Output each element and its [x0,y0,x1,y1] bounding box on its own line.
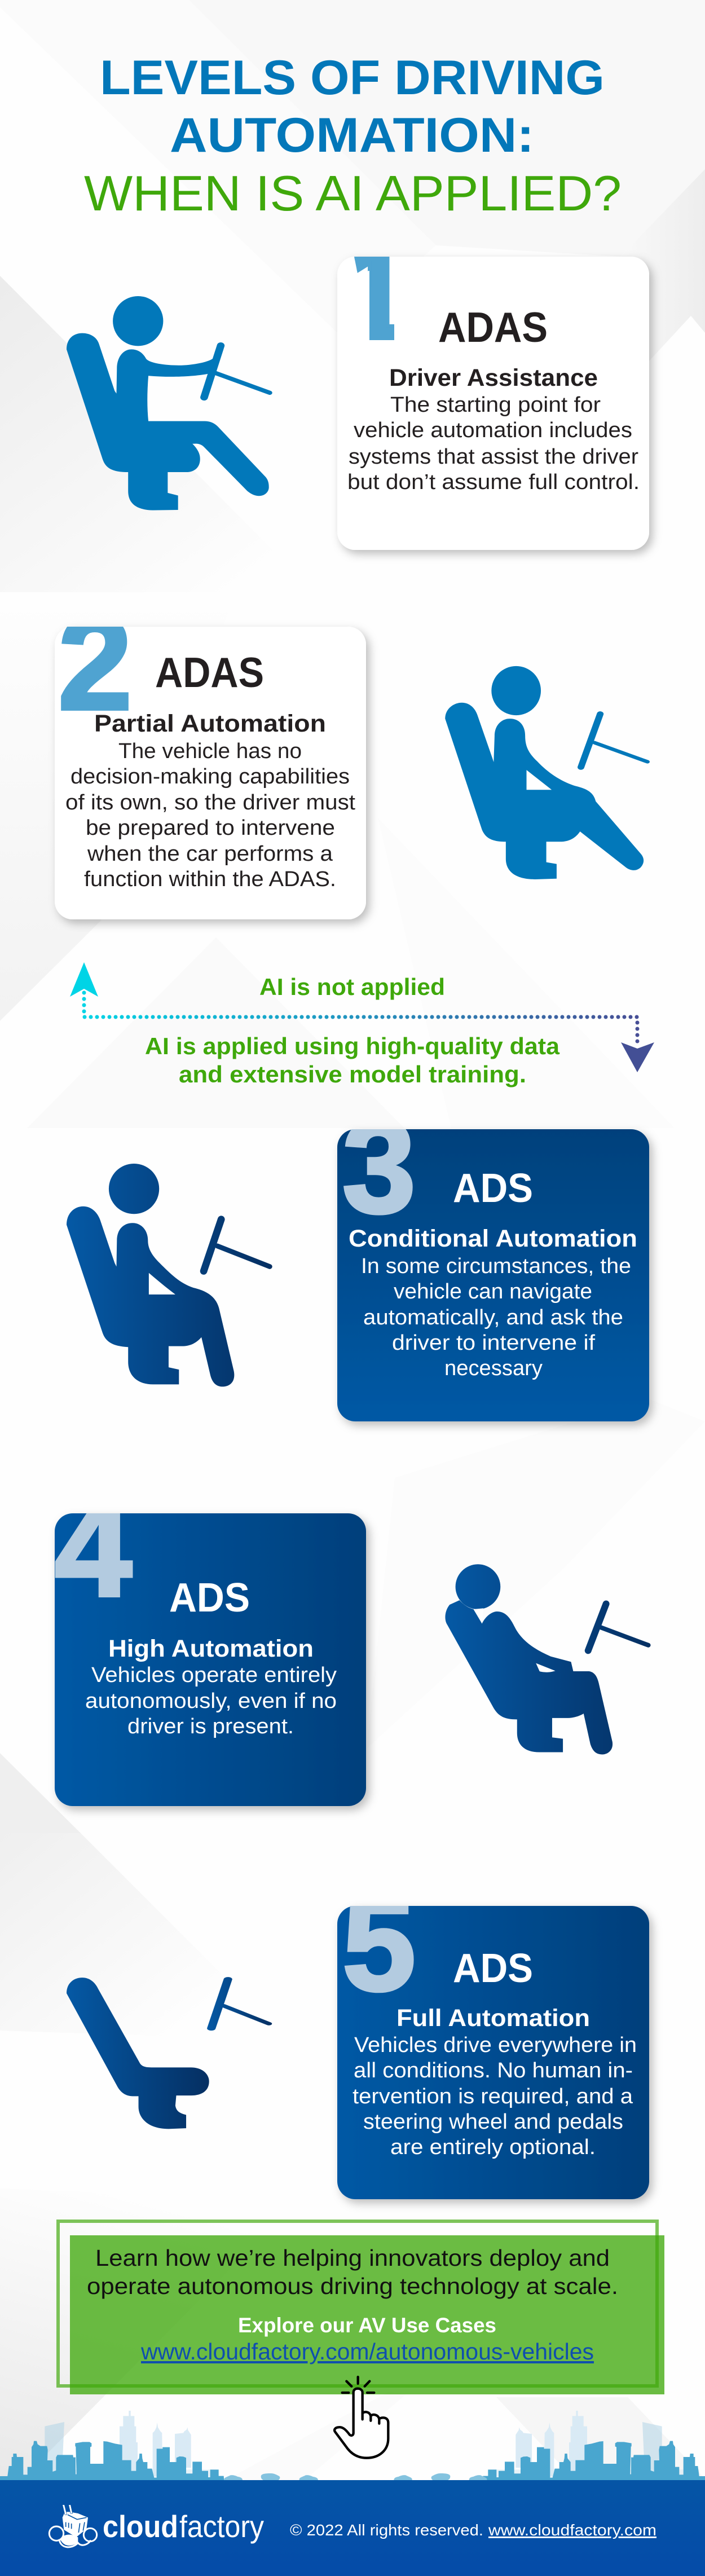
icon: pointing hand cursor [334,2377,388,2458]
card heading: ADS [453,1946,533,1991]
card text: The starting point for [390,393,601,417]
card subheading: Full Automation [396,2005,590,2032]
card text: when the car performs a [87,842,333,866]
card heading: ADS [453,1166,533,1211]
arrowhead up [70,962,98,997]
skyline right [483,2411,705,2481]
label: AI is applied: AI is applied using high-quality data [145,1033,560,1059]
label: AI is applied: and extensive model training. [179,1061,526,1087]
card heading: ADS [169,1575,250,1621]
call to action text: Learn how we’re helping innovators deploy and [95,2245,610,2271]
website link: www.cloudfactory.com [488,2521,656,2539]
card text [352,2033,637,2159]
number 3: 3 [342,1093,416,1240]
card text [65,739,355,891]
icon: level 5 empty seat and steering wheel [67,1978,269,2129]
icon: level 2 driver with hands off wheel [445,666,647,879]
title: LEVELS OF DRIVING [100,51,605,105]
copyright: © 2022 All rights reserved. [290,2521,483,2539]
card text: steering wheel and pedals [363,2110,623,2134]
panel: call to action [58,2221,664,2394]
label: AI is not applied: AI is not applied [259,974,445,1000]
card text: vehicle automation includes [354,419,632,442]
card text: In some circumstances, the [361,1254,631,1278]
logo wordmark second part: factory [179,2509,264,2544]
card text: but don’t assume full control. [347,470,640,494]
card text [85,1663,337,1738]
number 5: 5 [342,1870,416,2018]
explore label: Explore our AV Use Cases [238,2314,496,2337]
card subheading: Driver Assistance [389,364,598,391]
card subheading: High Automation [108,1635,314,1662]
card text: Vehicles operate entirely [91,1663,337,1687]
card background [337,257,649,550]
arrowhead down [621,1042,654,1072]
card text: systems that assist the driver [349,445,638,469]
link: www.cloudfactory.com/autonomous-vehicles [140,2339,594,2364]
panel: level 4 ADS high automation [55,1470,366,1806]
card text: Vehicles drive everywhere in [354,2033,637,2057]
card background [55,627,366,919]
call to action text [87,2245,618,2299]
skyline left [0,2411,224,2481]
card text [361,1254,631,1380]
card heading: ADAS [155,649,264,696]
card text [347,393,640,494]
card text: autonomously, even if no [85,1689,337,1713]
card subheading: Conditional Automation [349,1225,637,1252]
card subheading: Partial Automation [94,710,326,737]
panel: level 5 ADS full automation [337,1870,649,2199]
logo wordmark: cloud [103,2509,178,2544]
card text: decision-making capabilities [70,765,350,789]
card text: necessary [444,1357,543,1380]
call to action text: operate autonomous driving technology at scale. [87,2273,618,2299]
card text: function within the ADAS. [84,868,336,891]
logo: cloud factory icon [49,2505,97,2547]
card text: are entirely optional. [390,2135,596,2159]
green outline frame [58,2221,657,2386]
card heading: ADAS [438,303,548,351]
card text: of its own, so the driver must [65,791,355,814]
arrow: dotted line between AI is not applied and AI is applied [70,962,654,1072]
panel: level 3 ADS conditional automation [337,1093,649,1421]
icon: level 4 driver reclined with hands off wheel [445,1564,649,1754]
card background [337,1129,649,1421]
card text: be prepared to intervene [86,816,335,840]
card text: driver is present. [127,1715,294,1738]
card text: vehicle can navigate [394,1280,592,1304]
label: AI is applied [145,1033,560,1087]
card background [337,1906,649,2199]
title: WHEN IS AI APPLIED? [84,165,622,221]
title [84,51,622,221]
card text: automatically, and ask the [363,1306,623,1329]
cars on the road [224,2473,487,2480]
icon: level 3 driver with hands off wheel [67,1164,270,1386]
number 4: 4 [55,1470,132,1626]
card text: tervention is required, and a [352,2085,633,2108]
title: AUTOMATION: [170,108,534,162]
panel: level 1 ADAS driver assistance [337,219,649,550]
number 1: 1 [338,219,412,368]
green box [70,2235,664,2394]
card text: driver to intervene if [392,1331,595,1355]
panel: level 2 ADAS partial automation [55,589,366,919]
footer band [0,2480,705,2576]
icon: level 1 driver with hands on wheel and foot on pedal [67,296,270,510]
footer [0,2480,705,2576]
card text: The vehicle has no [118,739,302,763]
card background [55,1513,366,1806]
number 2: 2 [58,589,132,738]
card text: all conditions. No human in- [354,2059,633,2082]
